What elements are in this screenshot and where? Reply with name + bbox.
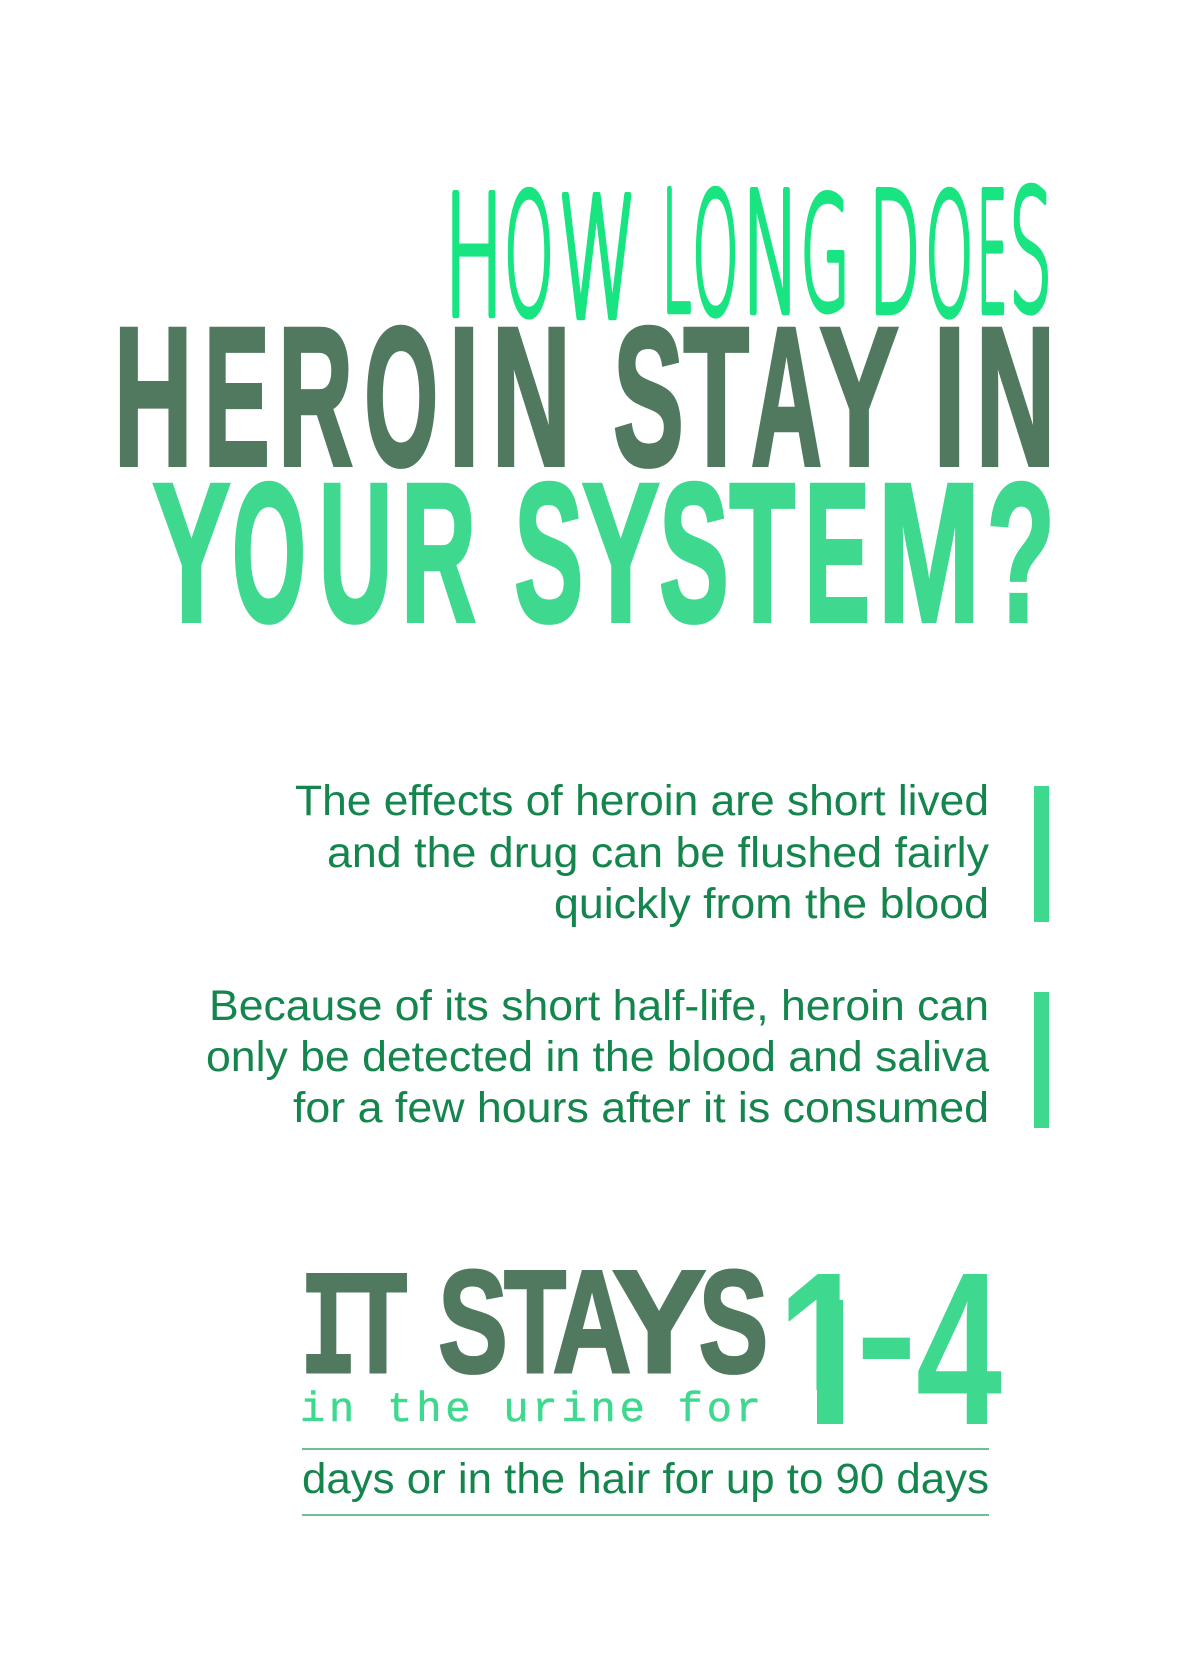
text: days or in the hair: days or in the hair for up to 90 days [302,1455,989,1503]
title line 1: N [742,158,800,352]
title line 1: E [977,158,1008,352]
title line 1: L [662,157,692,351]
title line 2: I [933,286,966,507]
accent bar 2 [1034,992,1049,1128]
heading: it stays: T [504,1240,566,1403]
title line 2: I [449,286,480,507]
heading: it stays: S [699,1240,768,1403]
title line 3: S [659,442,729,663]
text block: short-lived effects: and the drug can be flushed fairly [327,829,990,877]
heading: it stays: T [347,1250,409,1417]
title line 2: S [613,286,684,507]
title line 3: Y [582,442,660,663]
heading: it stays: A [552,1240,632,1403]
number: 1-4: 1 [777,1228,871,1471]
text block: short-lived effects: The effects of heroin are short lived [295,777,989,825]
text block: short-lived effects [295,777,990,928]
heading: it stays [300,1240,768,1417]
title line 1: D [869,158,920,352]
title line 3: O [232,442,306,663]
title line 3: E [804,442,870,663]
title line 2: R [278,286,353,507]
text block: half-life: Because of its short half-life, heroin can [209,982,989,1030]
title line 1: O [925,160,974,354]
title line 3: U [319,442,392,663]
title line 3: Y [152,442,231,663]
number: 1-4: 4 [916,1228,1002,1471]
title line 2: O [364,286,438,507]
title line 2: E [204,286,270,507]
title line 3: S [514,442,583,663]
heading: it stays: Y [612,1240,706,1403]
title line 3: T [729,442,795,663]
number: 1-4 [788,1274,1002,1424]
title line 1: G [800,164,850,346]
text block: half-life: only be detected in the blood and saliva [206,1033,989,1081]
title line 1: W [558,163,637,357]
title line 1: O [692,159,739,353]
title line 3: R [401,442,476,663]
accent bar 1 [1034,786,1049,922]
text block: short-lived effects: quickly from the blood [554,880,989,928]
title line 2: H [114,286,193,507]
text block: half-life [206,982,989,1132]
title line 1: O [504,160,554,354]
title line 2: N [492,286,571,507]
title line 2: A [751,286,822,507]
title line 3: ? [987,442,1055,663]
rule bottom [302,1514,989,1516]
title line 1: H [444,161,504,355]
heading: it stays: S [438,1240,508,1403]
number: 1-4: - [856,1233,917,1434]
title line 2: N [976,286,1055,507]
title line 2: T [683,286,749,507]
title line 2: Y [819,286,897,507]
caption: in the urine for: in the urine for [300,1386,761,1434]
text: S [1009,156,1052,350]
title [114,155,1055,663]
heading: it stays: I [300,1250,357,1417]
text block: half-life: for a few hours after it is consumed [293,1084,989,1132]
title line 3: M [878,442,980,663]
rule top [302,1448,989,1450]
